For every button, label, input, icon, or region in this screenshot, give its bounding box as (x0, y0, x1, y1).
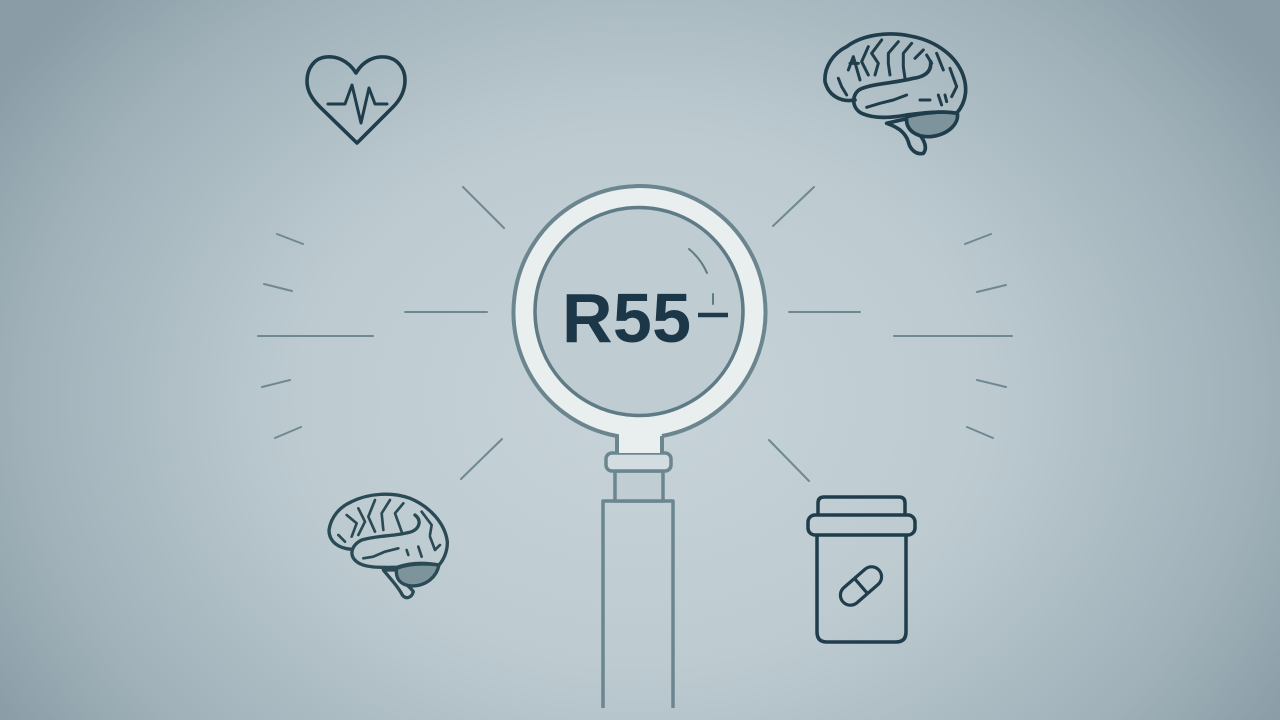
folds (338, 500, 440, 558)
brain stem (383, 570, 413, 598)
R55 label: R55 (562, 279, 691, 357)
icon: pill bottle (808, 497, 915, 642)
icon: small brain (329, 494, 447, 598)
lens ring (514, 186, 766, 453)
cerebellum (396, 564, 439, 586)
cerebellum (907, 112, 958, 137)
pill (836, 563, 886, 609)
brain stem (887, 119, 925, 154)
bottle lid (818, 497, 905, 515)
lens glare and marks (689, 249, 728, 315)
icon: heart with pulse (307, 57, 405, 143)
magnifying glass (514, 186, 766, 708)
outline (825, 34, 966, 117)
radiating lines (258, 187, 1012, 481)
folds (838, 40, 957, 107)
icon: large brain (825, 34, 966, 154)
bottle band (808, 515, 915, 535)
bottle body (817, 535, 906, 642)
handle (603, 453, 673, 708)
outline (329, 494, 447, 567)
